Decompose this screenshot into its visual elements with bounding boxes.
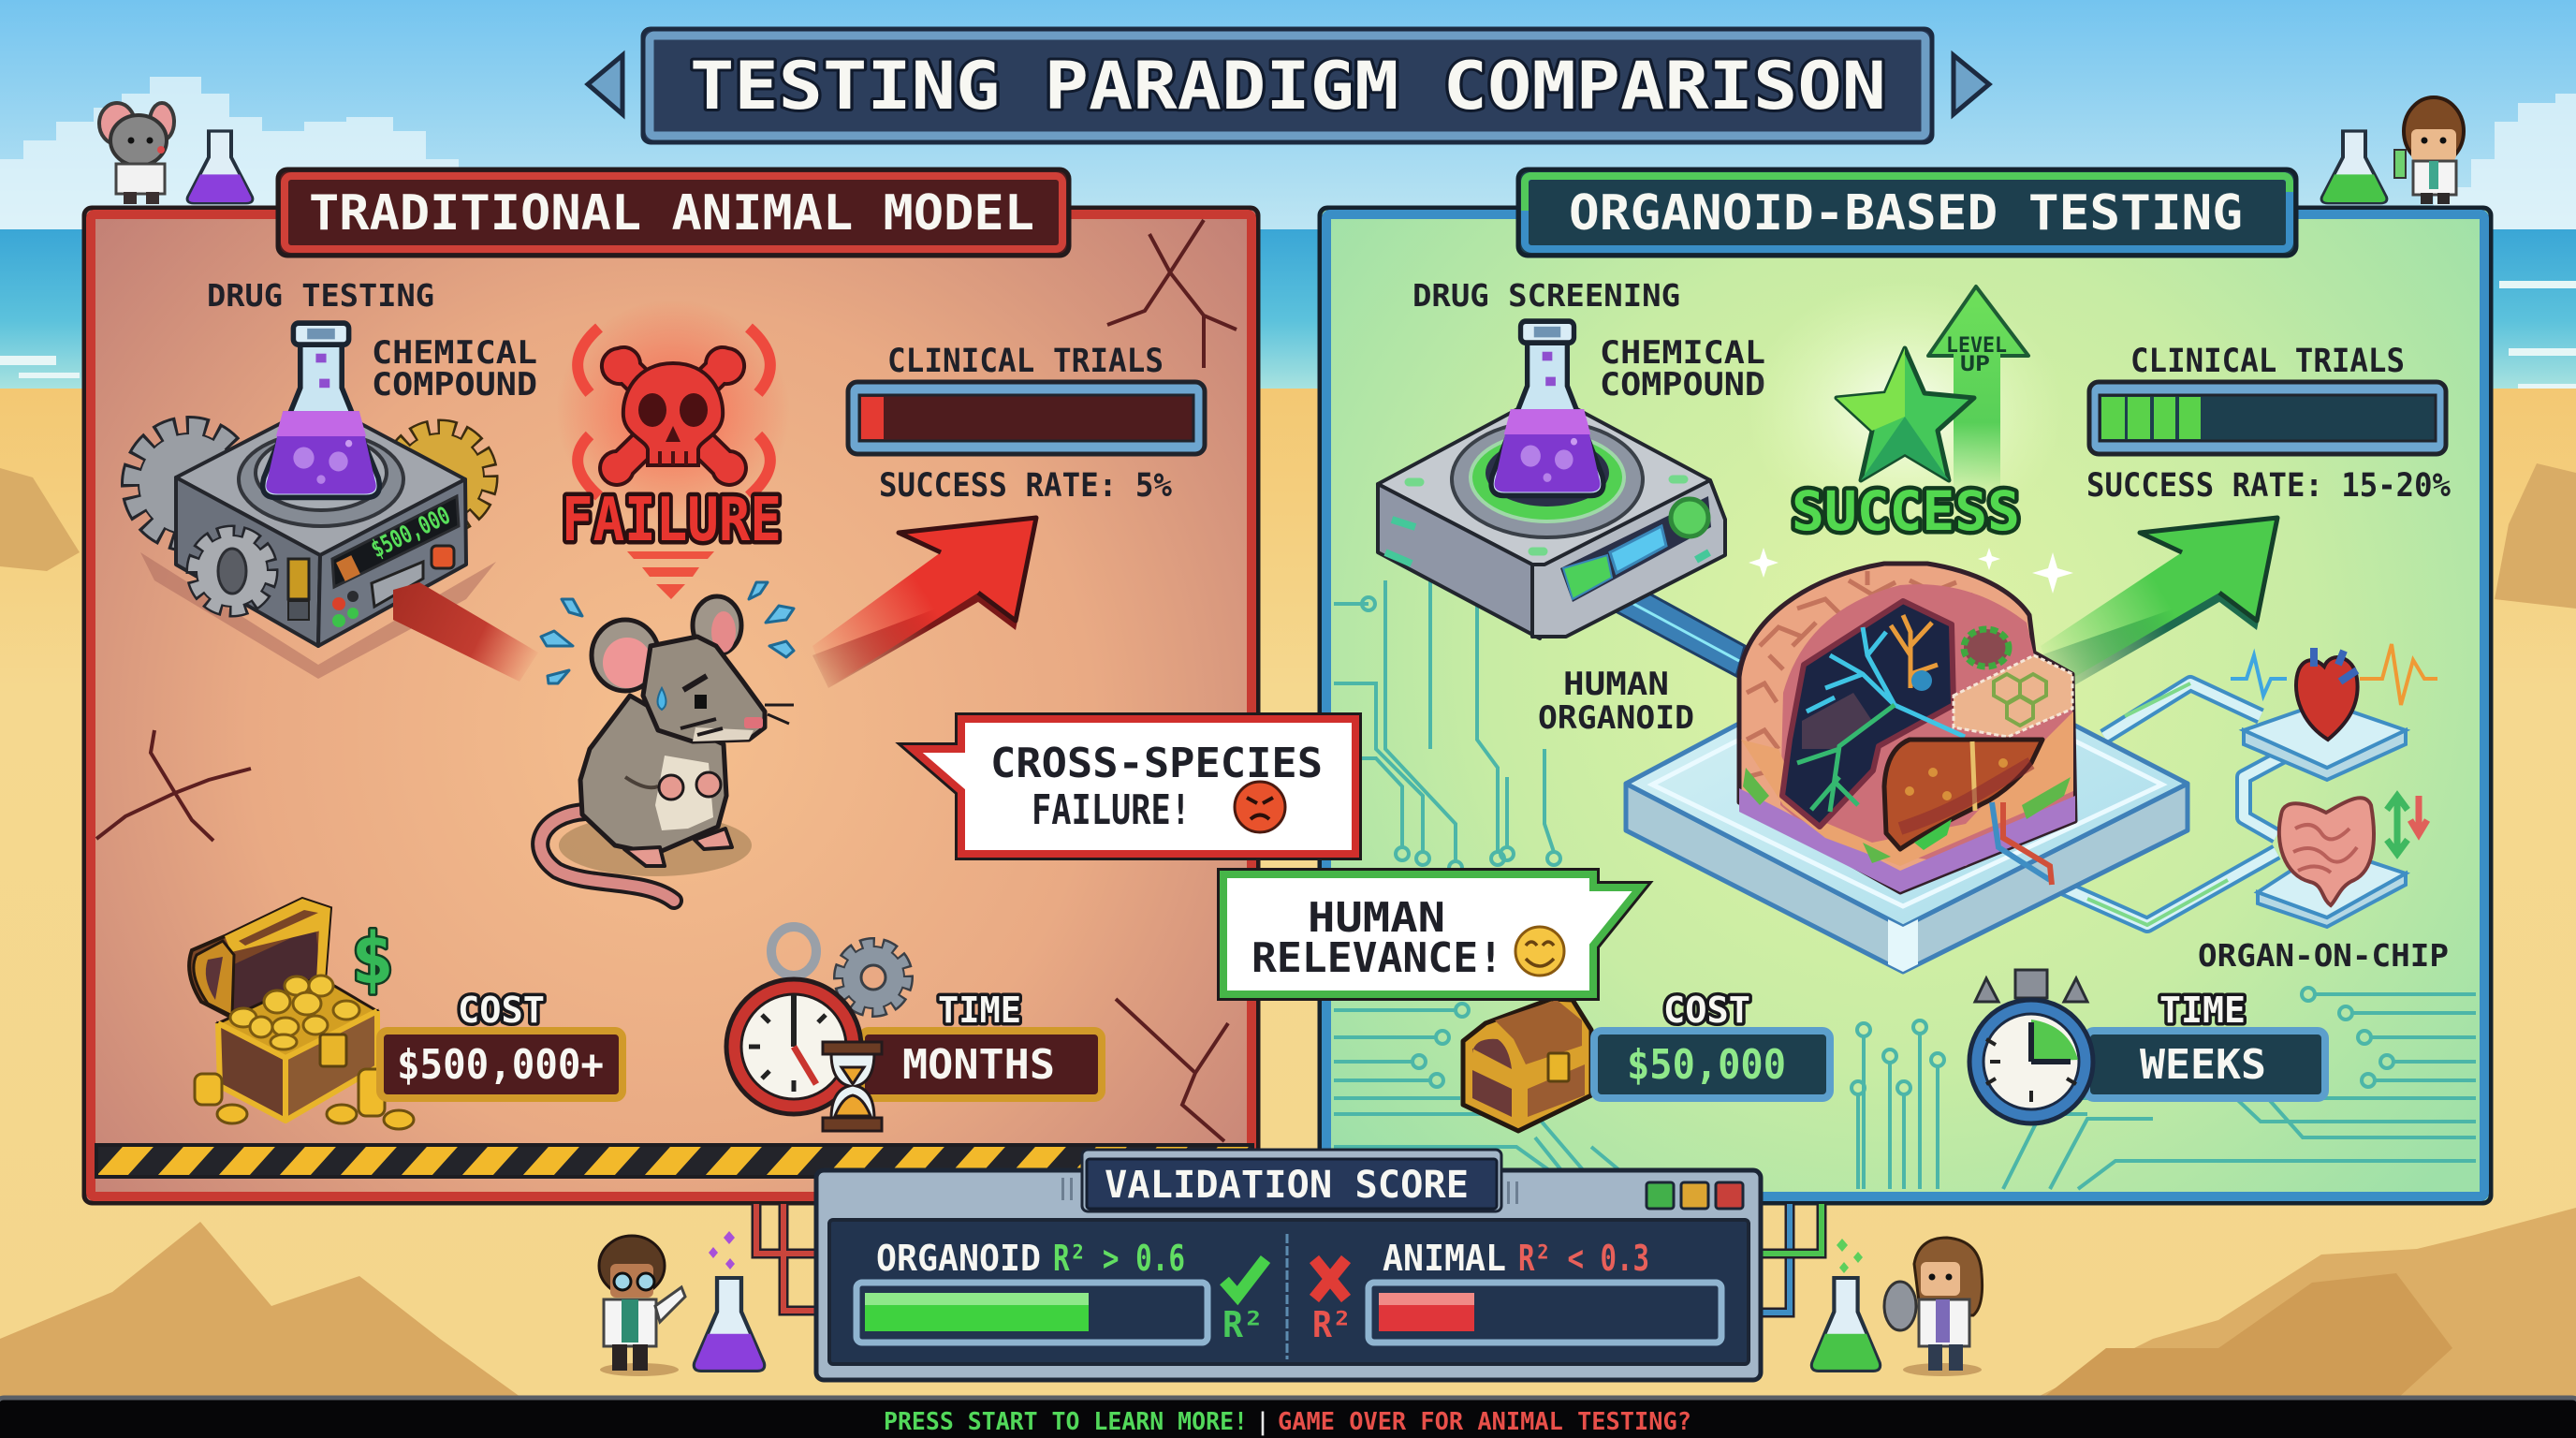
organoid brain liver block xyxy=(1739,564,2075,892)
flask: chemical compound xyxy=(263,323,379,497)
failure chevrons xyxy=(627,551,714,599)
emoji: angry face xyxy=(1235,782,1285,832)
arrow: beam machine to mouse xyxy=(393,582,538,682)
green r2: R² xyxy=(1222,1304,1264,1345)
label: cost left: COST xyxy=(458,990,545,1031)
label: chemical compound right: CHEMICAL xyxy=(1600,334,1765,372)
icon: treasure chest and coins xyxy=(189,899,414,1129)
title arrow left xyxy=(588,55,622,114)
time plate right xyxy=(2086,1031,2325,1098)
speech bubble: cross-species failure xyxy=(913,719,1355,854)
machine with flask and gears xyxy=(133,323,496,679)
chest left face xyxy=(1472,1070,1512,1117)
speech bubble: human relevance: RELEVANCE! xyxy=(1251,934,1503,982)
label: cost right: COST xyxy=(1663,990,1750,1031)
gear: back grey xyxy=(133,428,245,540)
mouse character xyxy=(540,582,794,901)
organoid r2 label xyxy=(876,1238,1185,1279)
organoid r2 label: ORGANOID xyxy=(876,1238,1041,1279)
icon: red skull and crossbones xyxy=(556,300,790,524)
heading plate: organoid-based testing xyxy=(1518,169,2296,256)
time plate left: MONTHS xyxy=(902,1041,1055,1089)
machine display: $500,000 xyxy=(367,502,455,564)
arrow: level up: LEVEL xyxy=(1946,334,2007,358)
arrow: red up to clinical trials xyxy=(812,518,1036,688)
mouse in lab coat mascot xyxy=(99,103,174,204)
chest silhouette xyxy=(1463,999,1591,1131)
stopwatch ring top xyxy=(771,927,816,976)
silver machine with flask xyxy=(1378,321,1725,638)
animal r2 label: R² < 0.3 xyxy=(1518,1238,1649,1279)
icon: dollar sign: $ xyxy=(351,917,394,1000)
label: human organoid: ORGANOID xyxy=(1538,699,1694,737)
heading plate: traditional animal model xyxy=(278,169,1069,256)
speech bubble: human relevance xyxy=(1223,874,1640,994)
chest wood lid xyxy=(1495,1000,1582,1064)
neural cross-section xyxy=(1782,601,1965,827)
panel: organoid-based testing xyxy=(1320,169,2491,1208)
label: chemical compound right xyxy=(1600,334,1765,404)
animal r2 bar xyxy=(1368,1283,1721,1343)
speech bubble: cross-species failure: CROSS-SPECIES xyxy=(990,740,1323,787)
chest lid interior xyxy=(231,927,321,1016)
dashed divider xyxy=(1286,1234,1288,1359)
label: clinical trials: CLINICAL TRIALS xyxy=(887,343,1164,380)
icon: blue stopwatch xyxy=(1969,970,2093,1123)
window tab xyxy=(1082,1150,1501,1211)
orange tissue layer xyxy=(1741,712,2073,866)
gear behind clock xyxy=(842,946,905,1009)
sweat drops xyxy=(541,582,794,683)
window inner screen xyxy=(829,1220,1749,1364)
purple bubbles xyxy=(709,1231,735,1269)
check mark xyxy=(1224,1259,1266,1296)
star glow xyxy=(1746,281,2064,543)
red r2: R² xyxy=(1312,1304,1352,1345)
animal r2 label xyxy=(1383,1238,1649,1279)
heart organ xyxy=(2296,657,2358,740)
chest lid xyxy=(189,899,330,1019)
label: chemical compound right: COMPOUND xyxy=(1600,366,1765,404)
label: chemical compound: COMPOUND xyxy=(372,366,537,404)
speech bubble: human relevance: HUMAN xyxy=(1308,894,1445,942)
organoid r2 label: R² > 0.6 xyxy=(1053,1238,1185,1279)
gear: back gold xyxy=(391,429,489,526)
label: drug testing: DRUG TESTING xyxy=(207,277,434,314)
icon: stopwatch gear and hourglass xyxy=(726,927,905,1131)
coin stacks xyxy=(195,1069,414,1129)
machine body xyxy=(176,403,466,646)
flask: bottom left purple xyxy=(695,1278,764,1371)
hourglass xyxy=(823,1042,882,1131)
heart chip xyxy=(2244,648,2406,780)
brain folds xyxy=(1747,571,2022,777)
mouse tail xyxy=(540,812,674,901)
mouse shadow xyxy=(559,814,752,876)
chest box xyxy=(218,976,377,1121)
machine front panel xyxy=(1560,496,1711,602)
label: human organoid: HUMAN xyxy=(1563,666,1669,703)
microfluidic pipes xyxy=(2040,683,2284,925)
green tissue under liver xyxy=(1914,819,1952,850)
machine controls xyxy=(288,546,454,627)
panel frame left xyxy=(84,208,1258,1203)
chest left cap xyxy=(1472,1039,1512,1069)
organoid r2 bar xyxy=(856,1283,1208,1343)
vessels blue and red xyxy=(1992,802,2050,880)
cost plate right xyxy=(1594,1031,1830,1098)
failure label: FAILURE xyxy=(562,486,782,555)
label: human organoid xyxy=(1538,666,1694,737)
scientist mascot top right xyxy=(2394,97,2464,204)
validation score window xyxy=(816,1150,1761,1380)
speech bubble: cross-species failure: FAILURE! xyxy=(1032,786,1191,834)
scientist with glasses xyxy=(599,1236,685,1376)
inner pink rim xyxy=(1780,584,2073,866)
title arrow right xyxy=(1954,55,1989,114)
cracks decoration xyxy=(96,220,1237,1141)
progress bar: 15-20 percent xyxy=(2089,382,2446,454)
vessel red xyxy=(2003,802,2052,885)
chest right face xyxy=(1528,1064,1585,1117)
mouse ears xyxy=(592,596,741,691)
label: clinical trials right: CLINICAL TRIALS xyxy=(2130,343,2405,380)
label: success rate 5 percent: SUCCESS RATE: 5% xyxy=(879,467,1172,505)
title text: TESTING PARADIGM COMPARISON xyxy=(690,48,1886,125)
machine ring xyxy=(1452,421,1643,537)
ticker: press start: PRESS START TO LEARN MORE! xyxy=(884,1408,1248,1436)
ticker separator: | xyxy=(1256,1408,1269,1436)
red x mark xyxy=(1314,1259,1346,1299)
organ-on-chip glass base xyxy=(1626,637,2188,972)
arrow: level up xyxy=(1928,286,2028,496)
ecg trace orange xyxy=(2360,644,2437,705)
label: chemical compound xyxy=(372,334,537,404)
platform ring xyxy=(239,433,403,526)
window buttons xyxy=(1647,1182,1743,1209)
heading plate: organoid-based testing: ORGANOID-BASED TESTING xyxy=(1569,185,2243,242)
heading plate: traditional animal model: TRADITIONAL ANIMAL MODEL xyxy=(309,185,1034,242)
mouse face xyxy=(657,676,794,741)
flask: compound on scanner xyxy=(1491,321,1603,495)
cost plate right: $50,000 xyxy=(1627,1041,1786,1089)
title banner xyxy=(588,29,1989,142)
purple base layers xyxy=(1739,788,2075,892)
label: success rate 15-20 percent: SUCCESS RATE: 15-20% xyxy=(2086,467,2451,505)
label: drug screening: DRUG SCREENING xyxy=(1412,277,1680,314)
time plate left xyxy=(861,1031,1102,1098)
mouse head xyxy=(643,637,765,741)
success label: SUCCESS xyxy=(1792,479,2020,543)
machine display xyxy=(332,496,459,587)
arrow: level up: UP xyxy=(1960,353,1990,376)
title plate xyxy=(643,29,1932,142)
progress bar: 5 percent xyxy=(848,382,1205,454)
green neuron ring xyxy=(1964,629,2009,667)
emoji: smiling face xyxy=(1515,927,1564,976)
intestine chip xyxy=(2258,798,2406,927)
ecg trace blue xyxy=(2231,655,2287,696)
intestine organ xyxy=(2279,798,2374,905)
hazard stripe xyxy=(96,1145,1252,1177)
sparkles xyxy=(1749,548,2073,594)
chest lock xyxy=(1548,1053,1569,1081)
chest gold trim xyxy=(218,1011,377,1121)
cost plate left xyxy=(380,1031,622,1098)
ticker bar xyxy=(0,1398,2576,1438)
liver xyxy=(1884,740,2042,849)
panel frame right xyxy=(1320,208,2491,1203)
panel: traditional animal model xyxy=(84,169,1258,1203)
icon: green star xyxy=(1837,348,1974,480)
window tab: VALIDATION SCORE xyxy=(1105,1164,1469,1207)
honeycomb tissue xyxy=(1954,655,2072,737)
time plate right: WEEKS xyxy=(2140,1041,2266,1089)
arrow: beam machine to organoid xyxy=(1616,593,1745,676)
animal r2 label: ANIMAL xyxy=(1383,1238,1506,1279)
clock face xyxy=(726,979,861,1114)
green bubbles xyxy=(1837,1239,1863,1273)
flask: top left purple xyxy=(188,131,252,203)
cost plate left: $500,000+ xyxy=(397,1041,604,1089)
label: time right: TIME xyxy=(2159,990,2246,1031)
flask: bottom right green xyxy=(1812,1278,1880,1371)
icon: closed chest xyxy=(1463,999,1591,1131)
label: organ-on-chip: ORGAN-ON-CHIP xyxy=(2198,937,2449,974)
gear: front grey xyxy=(195,534,270,609)
machine screen xyxy=(1610,526,1666,573)
arrow: green up to clinical trials xyxy=(2041,518,2277,688)
label: time left: TIME xyxy=(938,990,1021,1031)
up down arrows xyxy=(2387,796,2427,854)
machine body silver xyxy=(1378,393,1725,638)
connector pipes to validation window xyxy=(756,1204,1822,1313)
chest lock xyxy=(320,1034,346,1066)
ticker: game over: GAME OVER FOR ANIMAL TESTING? xyxy=(1278,1408,1691,1436)
window frame xyxy=(816,1170,1761,1380)
gold coin pile xyxy=(230,976,359,1049)
organoid outer tissue xyxy=(1739,564,2075,892)
circuit traces background xyxy=(1334,580,2476,1208)
window grip dots xyxy=(1061,1178,1518,1204)
scientist woman xyxy=(1884,1238,1983,1376)
mouse body xyxy=(580,696,726,854)
label: chemical compound: CHEMICAL xyxy=(372,334,537,372)
flask: top right green xyxy=(2322,131,2386,203)
